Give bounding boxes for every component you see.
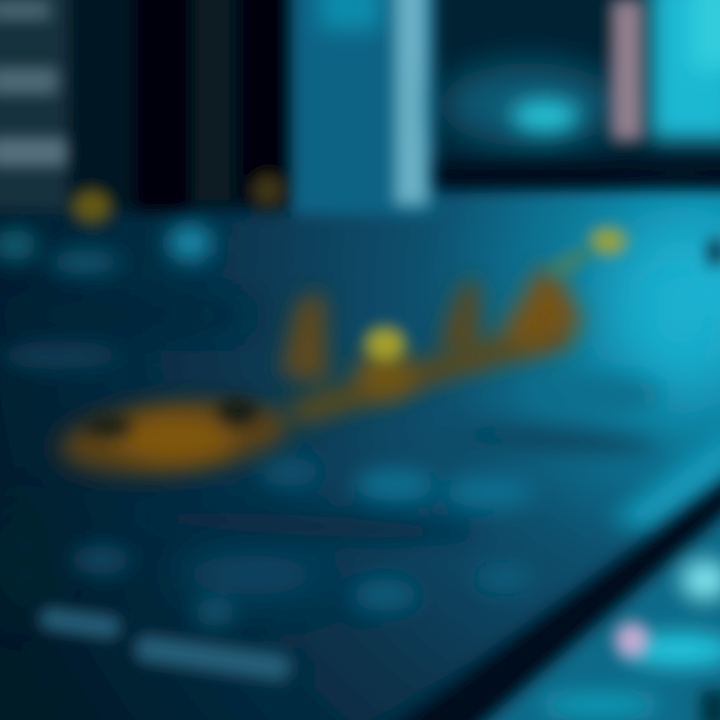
- surface: teal desk background: [0, 180, 720, 720]
- glow: blue patches on desk: [0, 225, 660, 626]
- icon: yellow dot upper right: [590, 228, 626, 254]
- panel: dark columns: [70, 0, 295, 210]
- dark streaks on desk: [0, 303, 660, 620]
- panel: top right dark screen: [436, 0, 720, 190]
- icon: amber dot right: [250, 172, 286, 208]
- corner: bottom right teal area: [440, 490, 720, 720]
- glow: right side of desk: [620, 230, 720, 390]
- icon: golden antler: [57, 268, 585, 483]
- panel: teal column with light stripe: [292, 0, 437, 215]
- glow: edge bright line right: [610, 425, 720, 530]
- glow: bright bars bottom right: [540, 560, 720, 720]
- panel: top left dark area with grey stripes: [0, 0, 80, 210]
- stripe: dark diagonal edge: [385, 472, 720, 720]
- text strip: light bars bottom left: [39, 607, 291, 682]
- mark: dark notch right edge: [706, 238, 720, 266]
- icon: bright yellow dot centre: [365, 327, 405, 361]
- trail: dim yellow link to dot: [545, 242, 595, 282]
- icon: amber dot left: [72, 189, 112, 223]
